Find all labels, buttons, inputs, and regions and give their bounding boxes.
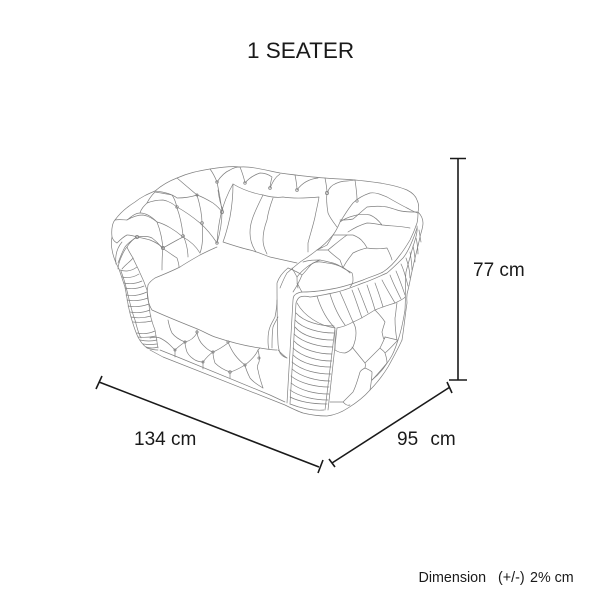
footnote: dimension tolerance: Dimension	[418, 570, 486, 586]
pillow	[223, 184, 319, 263]
arm band front	[287, 212, 418, 403]
sofa base outline	[150, 340, 402, 416]
right back cushion tufting	[280, 193, 418, 288]
back cushion tufting	[115, 213, 163, 248]
sofa line drawing	[111, 167, 423, 416]
dimension: height	[449, 158, 467, 380]
label: width: 134 cm	[134, 429, 196, 450]
label: height: 77 cm	[473, 260, 525, 281]
title: 1 SEATER	[247, 38, 354, 63]
arm outer cushion panels	[337, 297, 405, 328]
right back tufting near pillow	[270, 174, 357, 200]
arm front ribs vertical	[317, 230, 421, 328]
seat cushion	[147, 285, 277, 350]
seat front tufting	[168, 320, 197, 342]
label: depth: 95 cm	[397, 429, 456, 450]
footnote: dimension tolerance: 2% cm	[530, 570, 574, 586]
dimension: width	[96, 376, 323, 473]
arm front ribs horizontal	[297, 303, 335, 328]
left arm front strip	[119, 269, 158, 350]
back seam along seat	[148, 247, 217, 285]
footnote: dimension tolerance: (+/-)	[498, 570, 525, 586]
dimension: depth	[329, 382, 452, 467]
sofa back outline	[111, 167, 419, 269]
side arm cushion	[277, 268, 288, 358]
